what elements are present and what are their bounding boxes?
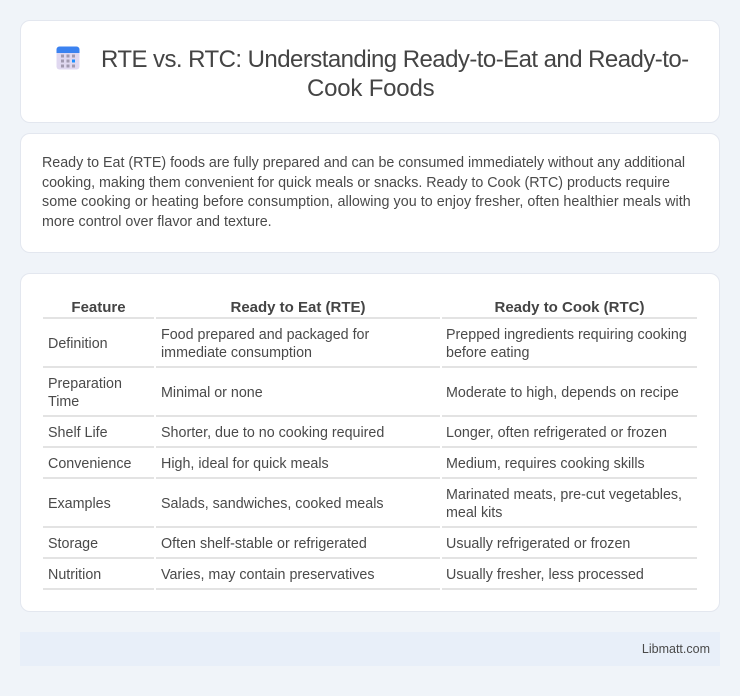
row: storage: Storage	[48, 536, 98, 552]
row: convenience	[48, 456, 645, 472]
row: shelf life: Longer, often refrigerated or frozen	[446, 425, 667, 441]
row: storage	[48, 536, 630, 552]
row: definition	[48, 327, 687, 361]
row: definition: Definition	[48, 336, 108, 352]
panel: comparison table	[20, 273, 720, 612]
row: examples	[48, 487, 682, 521]
header row: Ready to Cook (RTC)	[494, 299, 644, 316]
row: storage: Usually refrigerated or frozen	[446, 536, 630, 552]
header row: Ready to Eat (RTE)	[230, 299, 366, 316]
row: preparation time: Minimal or none	[161, 385, 263, 401]
row: shelf life: Shorter, due to no cooking required	[161, 425, 384, 441]
row: preparation time: Time	[48, 394, 79, 410]
row: nutrition: Usually fresher, less processed	[446, 567, 644, 583]
row: preparation time: Preparation	[48, 376, 122, 392]
intro paragraph: some cooking or heating before consumption, allowing you to enjoy fresher, often healthier meals with	[42, 194, 691, 210]
row: convenience: Medium, requires cooking skills	[446, 456, 645, 472]
row: definition: before eating	[446, 345, 529, 361]
row: definition: Prepped ingredients requiring cooking	[446, 327, 687, 343]
intro paragraph: Ready to Eat (RTE) foods are fully prepared and can be consumed immediately without any additional	[42, 155, 685, 171]
intro paragraph	[42, 155, 691, 230]
row: convenience: Convenience	[48, 456, 131, 472]
row: definition: Food prepared and packaged for	[161, 327, 369, 343]
row: preparation time	[48, 376, 679, 410]
row: examples: Examples	[48, 496, 111, 512]
panel: intro text	[20, 133, 720, 253]
row: examples: Marinated meats, pre-cut vegetables,	[446, 487, 682, 503]
title text: Cook Foods	[307, 75, 434, 102]
intro paragraph: cooking, making them convenient for quick meals or snacks. Ready to Cook (RTC) products require	[42, 174, 670, 190]
header row: Feature	[71, 299, 126, 316]
row: nutrition: Nutrition	[48, 567, 101, 583]
footer	[20, 632, 720, 666]
row: storage: Often shelf-stable or refrigerated	[161, 536, 367, 552]
icon: calendar grid	[56, 46, 80, 70]
row: nutrition: Varies, may contain preservatives	[161, 567, 374, 583]
row: examples: Salads, sandwiches, cooked meals	[161, 496, 384, 512]
header row	[71, 299, 644, 316]
panel: title	[20, 20, 720, 123]
title text: RTE vs. RTC: Understanding Ready-to-Eat and Ready-to-	[101, 46, 689, 73]
intro paragraph: more control over flavor and texture.	[42, 214, 272, 230]
row: preparation time: Moderate to high, depends on recipe	[446, 385, 679, 401]
row: shelf life: Shelf Life	[48, 425, 108, 441]
row: convenience: High, ideal for quick meals	[161, 456, 329, 472]
row: shelf life	[48, 425, 667, 441]
row: definition: immediate consumption	[161, 345, 312, 361]
row: nutrition	[48, 567, 644, 583]
title text	[101, 46, 689, 102]
row: examples: meal kits	[446, 505, 502, 521]
footer text: Libmatt.com	[642, 642, 710, 656]
